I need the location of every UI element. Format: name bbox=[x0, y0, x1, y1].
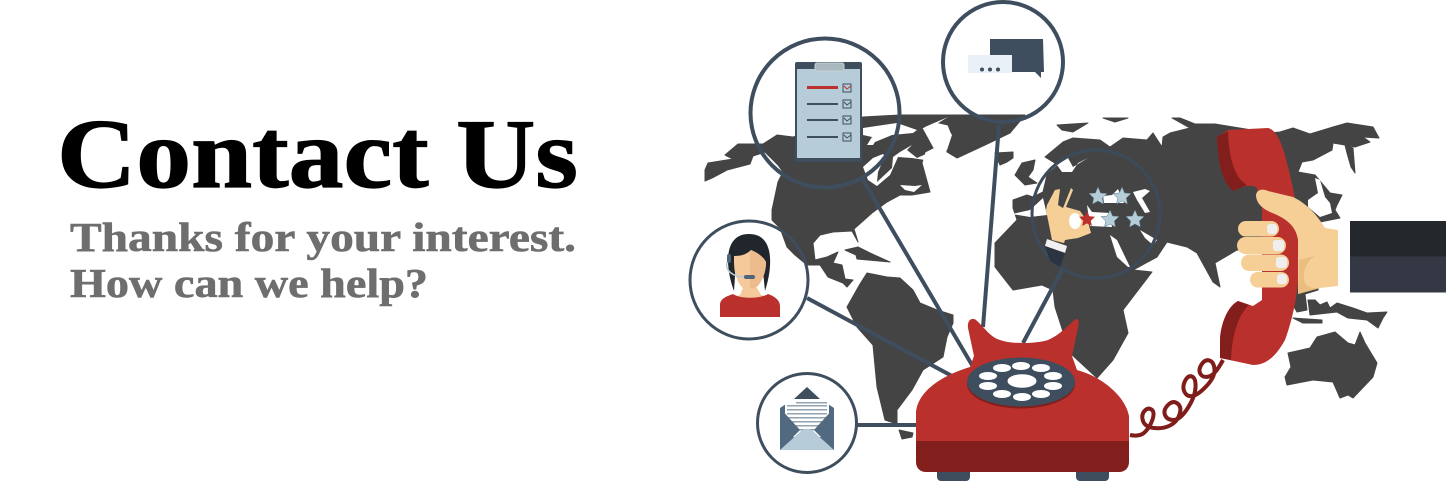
map: Cuba bbox=[845, 247, 890, 262]
map: Australia bbox=[1285, 332, 1377, 398]
icon: clipboard bbox=[795, 62, 862, 162]
icon: pinching hand bbox=[1045, 188, 1091, 267]
map: islands bbox=[995, 118, 1387, 328]
telephone handset bbox=[1217, 128, 1300, 365]
telephone feet bbox=[937, 466, 970, 481]
icon: open envelope bbox=[780, 387, 834, 450]
icon: agent with headset bbox=[720, 234, 780, 317]
connector lines bbox=[807, 125, 1062, 425]
map: seas and lakes bbox=[863, 117, 1332, 267]
circle: clipboard bbox=[750, 38, 900, 188]
map: South America bbox=[847, 273, 953, 424]
telephone bbox=[916, 319, 1223, 481]
telephone body bbox=[916, 319, 1129, 441]
telephone dial bbox=[967, 358, 1075, 408]
map: Tierra del Fuego bbox=[899, 430, 913, 439]
telephone cord bbox=[1130, 360, 1223, 436]
subtitle text: How can we help? bbox=[70, 260, 428, 306]
icon: red star bbox=[1079, 211, 1095, 226]
circle: mail bbox=[758, 374, 856, 472]
icon: chat bubbles bbox=[968, 39, 1044, 78]
subtitle text: Thanks for your interest. bbox=[70, 214, 576, 260]
icon: stars bbox=[1089, 187, 1144, 227]
circle: chat bbox=[943, 2, 1063, 122]
world map bbox=[705, 115, 1387, 439]
hand holding handset bbox=[1237, 190, 1338, 294]
map: North and Central America with Greenland bbox=[705, 115, 1025, 287]
fingers bbox=[1238, 221, 1279, 236]
sleeve bbox=[1350, 221, 1446, 292]
title: Contact Us bbox=[57, 100, 578, 209]
subtitle text bbox=[70, 214, 576, 306]
circle: agent bbox=[690, 221, 808, 339]
map: Eurasia and Africa bbox=[995, 118, 1379, 378]
circle: stars and hand bbox=[1032, 150, 1160, 278]
